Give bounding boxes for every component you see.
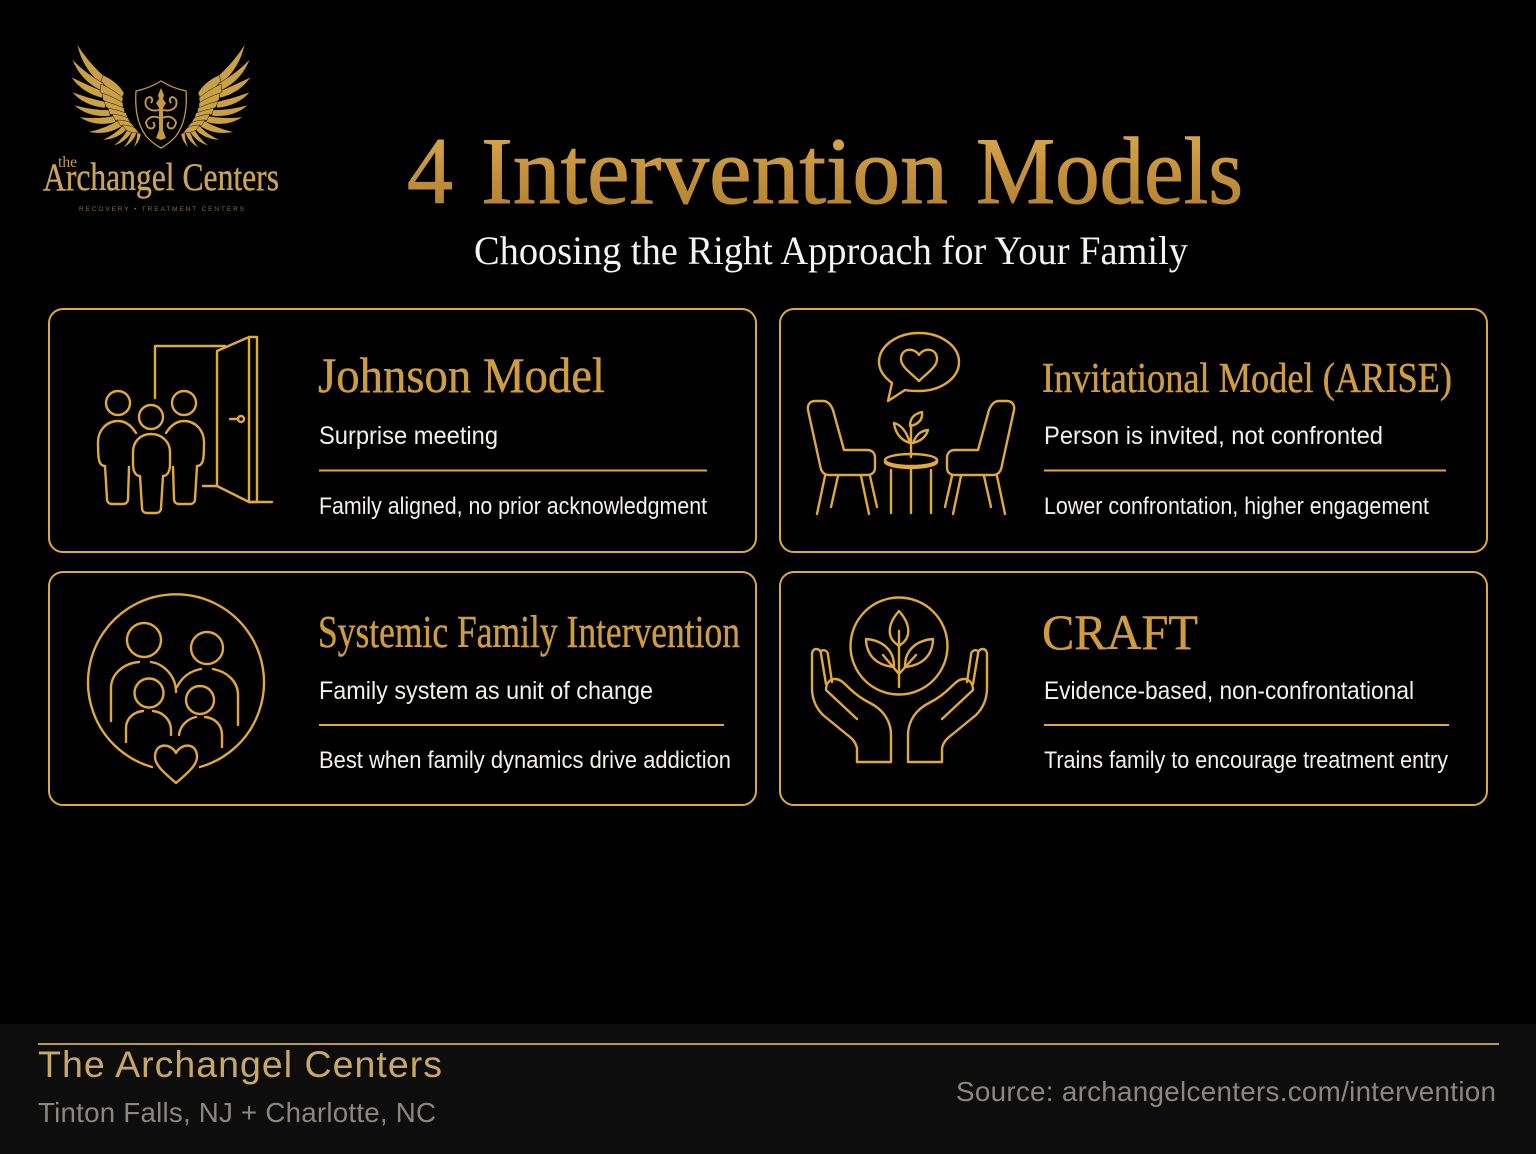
logo wordmark: the [58,154,77,171]
icon: family in circle with heart [88,594,264,783]
icon: hands holding plant [812,598,987,762]
detail text: Lower confrontation, higher engagement [1044,493,1429,520]
approach text: Evidence-based, non-confrontational [1044,677,1414,705]
approach text: Family system as unit of change [319,677,653,705]
heading: Invitational Model (ARISE) [1042,356,1452,402]
approach text: Person is invited, not confronted [1044,422,1383,450]
footer locations: Tinton Falls, NJ + Charlotte, NC [38,1097,436,1128]
icon: family at open door [98,337,272,513]
title: Models [976,118,1243,224]
panel: Invitational Model [780,309,1487,552]
icon: right wing [181,44,251,148]
panel: Johnson Model [49,309,756,552]
footer [0,1024,1536,1154]
subtitle: Choosing the Right Approach for Your Family [474,228,1188,273]
logo wordmark [43,154,279,213]
icon: left wing [71,44,141,148]
detail text: Trains family to encourage treatment entry [1044,747,1448,774]
icon: shield with fleur [136,81,186,148]
footer organisation name: The Archangel Centers [38,1043,442,1085]
panel: Systemic Family Intervention [49,572,756,805]
title: 4 [407,118,453,224]
detail text: Family aligned, no prior acknowledgment [319,493,707,520]
logo wordmark: Archangel Centers [43,156,279,199]
heading: Johnson Model [318,347,605,403]
heading: Systemic Family Intervention [318,606,740,657]
panel: CRAFT [780,572,1487,805]
approach text: Surprise meeting [319,422,498,450]
detail text: Best when family dynamics drive addiction [319,747,731,774]
logo: The Archangel Centers [43,44,279,213]
footer source: Source: archangelcenters.com/intervention [956,1076,1496,1107]
title: Intervention [481,118,948,224]
icon: two chairs, plant and heart bubble [808,333,1014,514]
logo wordmark: RECOVERY • TREATMENT CENTERS [79,206,245,213]
heading: CRAFT [1042,604,1198,660]
